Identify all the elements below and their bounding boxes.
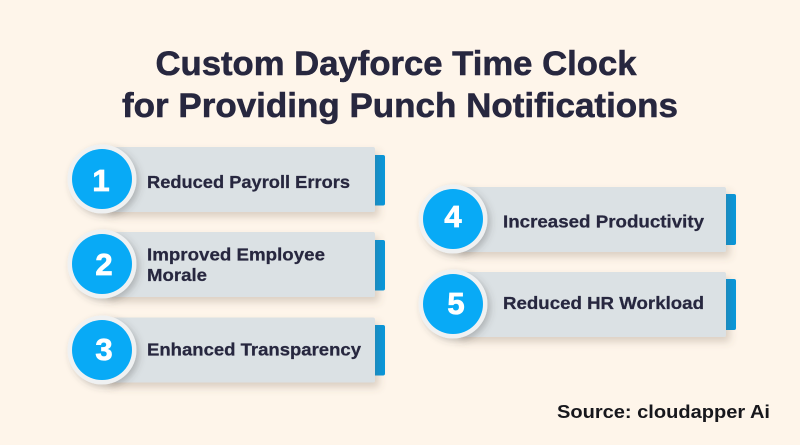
item 3 number badge: 3 <box>95 332 113 367</box>
item 5 tab <box>721 279 736 330</box>
title <box>122 45 678 125</box>
item 3 tab <box>370 325 385 376</box>
item 4: increased productivity <box>418 184 736 254</box>
item 2 number badge: 2 <box>95 247 113 282</box>
item 5 number badge <box>418 270 488 338</box>
item 2 label: Improved Employee <box>147 244 325 264</box>
item 2 tab <box>370 240 385 290</box>
item 1 number badge <box>68 144 136 214</box>
item 1 label: Reduced Payroll Errors <box>147 172 350 192</box>
item 1 card <box>105 147 375 212</box>
item 5: reduced hr workload <box>418 270 736 338</box>
title: for Providing Punch Notifications <box>122 87 678 125</box>
item 3 number badge <box>68 316 136 384</box>
item 3 label: Enhanced Transparency <box>147 340 361 360</box>
source credit: Source: cloudapper Ai <box>557 401 770 422</box>
item 5 card <box>456 272 726 337</box>
item 4 tab <box>721 194 736 245</box>
item 2 label <box>147 244 325 285</box>
item 4 number badge <box>418 184 488 254</box>
item 2 number badge <box>68 230 136 298</box>
item 2 card <box>105 232 375 297</box>
item 1 number badge: 1 <box>92 163 110 198</box>
item 1: reduced payroll errors <box>68 144 385 214</box>
item 3: enhanced transparency <box>68 316 385 384</box>
item 1 tab <box>370 155 385 206</box>
item 5 label: Reduced HR Workload <box>503 293 704 313</box>
title: Custom Dayforce Time Clock <box>156 45 637 83</box>
item 2 label: Morale <box>147 265 207 285</box>
item 5 number badge: 5 <box>447 286 465 321</box>
item 4 number badge: 4 <box>444 199 462 234</box>
item 4 label: Increased Productivity <box>503 212 704 232</box>
item 2: improved employee morale <box>68 230 385 298</box>
item 3 card <box>105 318 375 382</box>
item 4 card <box>456 187 726 252</box>
